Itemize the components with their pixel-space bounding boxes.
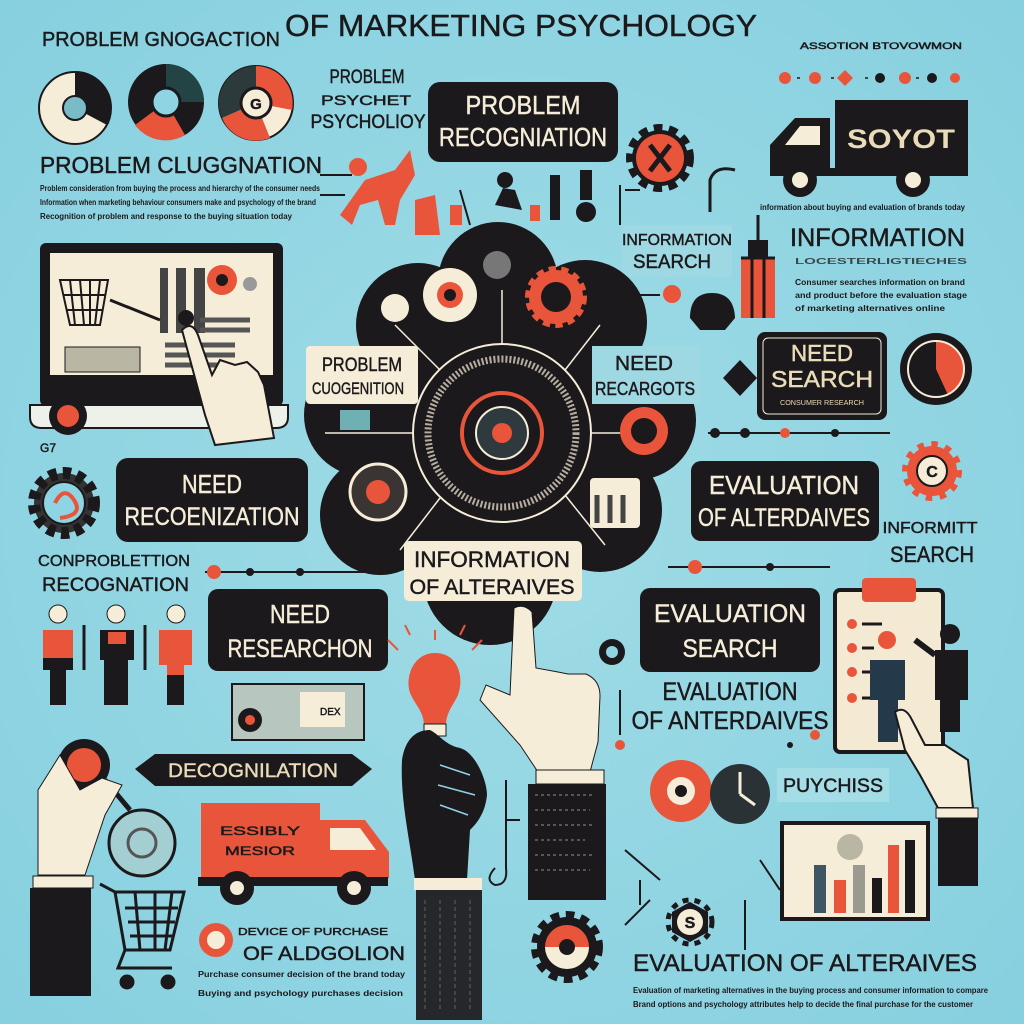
heading: evaluation of alternatives: EVALUATION OF ALTERAIVES <box>633 950 977 977</box>
gear: bottom centre <box>537 917 597 977</box>
label: purchase <box>777 768 889 802</box>
heading: bottom left: OF ALDGOLION <box>243 944 405 965</box>
panel: evaluation of alteratives: EVALUATION <box>709 470 859 500</box>
text block: information: of marketing alternatives online <box>795 304 946 313</box>
text block: bottom right: Evaluation of marketing alternatives in the buying process and consumer information to compare <box>633 986 989 995</box>
heading: information: INFORMATION <box>790 224 965 252</box>
icon: red tower <box>741 215 775 318</box>
heading: problem psychology: PROBLEM <box>330 67 404 88</box>
label: informitt search <box>882 520 978 567</box>
label: informitt search: INFORMITT <box>882 520 978 537</box>
heading: evaluation of anterdaives: EVALUATION <box>662 678 798 706</box>
text block: bottom left <box>198 970 406 998</box>
panel: need search <box>757 332 887 420</box>
text block: problem cognition: Problem consideration from buying the process and hierarchy of the consumer needs <box>40 184 320 193</box>
gear: left: G7 <box>40 441 56 455</box>
label: information of alteratives: INFORMATION <box>414 547 570 572</box>
heading: problem psychology: PSYCHET <box>321 92 412 108</box>
target rings <box>325 290 650 550</box>
text block: bottom right <box>633 986 989 1009</box>
illustration: brochure: DEX <box>320 707 341 718</box>
text block: problem cognition <box>40 184 320 221</box>
bar chart <box>782 823 928 919</box>
illustration: people and machinery <box>320 150 640 235</box>
heading: evaluation of anterdaives: OF ANTERDAIVES <box>632 707 828 735</box>
label: information search: INFORMATION <box>622 232 732 249</box>
people figures <box>43 605 192 705</box>
icon: gauge <box>900 333 972 405</box>
text block: information: LOCESTERLIGTIECHES <box>795 257 968 266</box>
text block: right small lines: information about buying and evaluation of brands today <box>760 203 966 212</box>
hand pointer: laptop <box>178 310 274 445</box>
panel: need recognization: RECOENIZATION <box>124 503 300 531</box>
text block: bottom left: Buying and psychology purchases decision <box>198 989 403 998</box>
icons: paired circles <box>650 760 770 824</box>
heading: problem cognition: PROBLEM CLUGGNATION <box>40 152 322 178</box>
s gear icon <box>668 900 712 944</box>
icon: lightbulb <box>388 625 482 736</box>
icon: red truck <box>198 803 389 905</box>
icon: red gear right: C <box>926 464 938 481</box>
heading: bottom left: DEVICE OF PURCHASE <box>238 927 388 938</box>
panel: need research: NEED <box>270 599 330 629</box>
panel: evaluation search <box>640 588 820 672</box>
heading: top right: ASSOTION BTOVOWMON <box>800 41 962 51</box>
panel: problem recognition <box>428 82 618 162</box>
label: problem cognition: CUOGENITION <box>312 379 404 398</box>
text block: information <box>795 257 968 313</box>
hand: pointing up <box>480 606 606 900</box>
icon: red truck: ESSIBLY <box>220 824 300 838</box>
arrow label: decognilation <box>135 754 372 786</box>
panel: need research: RESEARCHON <box>228 635 372 663</box>
heading: conproblettion recognation: CONPROBLETTION <box>38 553 190 570</box>
title: OF MARKETING PSYCHOLOGY <box>285 8 757 43</box>
label: need recargots: RECARGOTS <box>595 379 695 399</box>
label: information search <box>622 225 732 277</box>
text block: bottom left: Purchase consumer decision of the brand today <box>198 970 406 979</box>
text block: problem cognition: Recognition of problem and response to the buying situation today <box>40 212 293 221</box>
label: information search: SEARCH <box>633 252 711 273</box>
label: information of alteratives <box>404 541 582 601</box>
central flower <box>304 222 696 645</box>
icon: truck soyot: SOYOT <box>847 124 956 154</box>
laptop <box>30 243 288 428</box>
icon: diamond <box>723 360 757 396</box>
s gear icon: S <box>685 915 696 932</box>
panel: need search: SEARCH <box>771 366 873 392</box>
heading: top left: PROBLEM GNOGACTION <box>42 29 280 51</box>
text block: problem cognition: Information when marketing behaviour consumers make and psychology of the brand <box>40 198 316 207</box>
timeline: left <box>205 565 375 579</box>
hand: holding bulb <box>402 730 487 1020</box>
panel: need recognization: NEED <box>182 469 242 499</box>
clipboard <box>835 578 943 752</box>
small details: lower middle <box>625 730 820 950</box>
panel: evaluation of alteratives: OF ALTERDAIVES <box>698 504 870 532</box>
icon: shopping cart <box>100 884 184 988</box>
gear: left <box>34 397 94 533</box>
small icon: hook <box>490 780 520 885</box>
icon: dial <box>599 639 625 750</box>
icon: lamp <box>710 169 735 212</box>
heading: conproblettion recognation <box>38 553 190 596</box>
text block: information: Consumer searches information on brand <box>795 278 965 287</box>
heading: bottom left <box>199 923 405 965</box>
label: information of alteratives: OF ALTERAIVES <box>410 576 574 599</box>
person at clipboard <box>915 624 968 732</box>
timeline: right lower <box>668 560 830 574</box>
panel: need recognization <box>116 458 308 542</box>
panel: evaluation search: SEARCH <box>682 635 778 663</box>
label: problem cognition: PROBLEM <box>322 355 402 376</box>
label: need recargots <box>592 346 700 404</box>
panel: need search: NEED <box>791 340 853 366</box>
pie charts <box>39 64 293 144</box>
label: need recargots: NEED <box>615 353 673 375</box>
heading: problem psychology: PSYCHOLIOY <box>310 112 426 133</box>
panel: need research <box>208 589 388 671</box>
pie charts: G <box>250 96 262 113</box>
icon: red gear <box>632 130 688 186</box>
icon: red truck: MESIOR <box>225 844 295 858</box>
icon: red gear right <box>907 446 957 496</box>
panel: evaluation search: EVALUATION <box>654 600 806 628</box>
timeline: right <box>708 428 890 438</box>
flower icons <box>340 251 668 528</box>
hand: clipboard pointer <box>895 710 978 886</box>
icon: truck soyot <box>770 100 968 197</box>
heading: problem psychology <box>310 67 426 133</box>
panel: evaluation of alteratives <box>691 461 879 541</box>
heading: conproblettion recognation: RECOGNATION <box>42 575 189 596</box>
label: informitt search: SEARCH <box>890 542 974 567</box>
panel: need search: CONSUMER RESEARCH <box>780 400 864 407</box>
heading: evaluation of anterdaives <box>632 678 828 735</box>
panel: problem recognition: PROBLEM <box>466 90 580 120</box>
text block: information: and product before the evaluation stage <box>795 291 968 300</box>
small dots row: top right <box>779 70 960 86</box>
label: problem cognition <box>306 346 418 404</box>
small icons: beside tower <box>640 285 735 330</box>
panel: problem recognition: RECOGNIATION <box>439 122 607 152</box>
illustration: brochure <box>232 684 364 740</box>
arrow label: decognilation: DECOGNILATION <box>168 761 338 782</box>
shopping grid on screen <box>60 280 108 325</box>
icon: magnifier with hand <box>30 739 175 996</box>
label: purchase: PUYCHISS <box>783 776 883 797</box>
text block: bottom right: Brand options and psychology attributes help to decide the final purchase for the customer <box>633 1000 973 1009</box>
